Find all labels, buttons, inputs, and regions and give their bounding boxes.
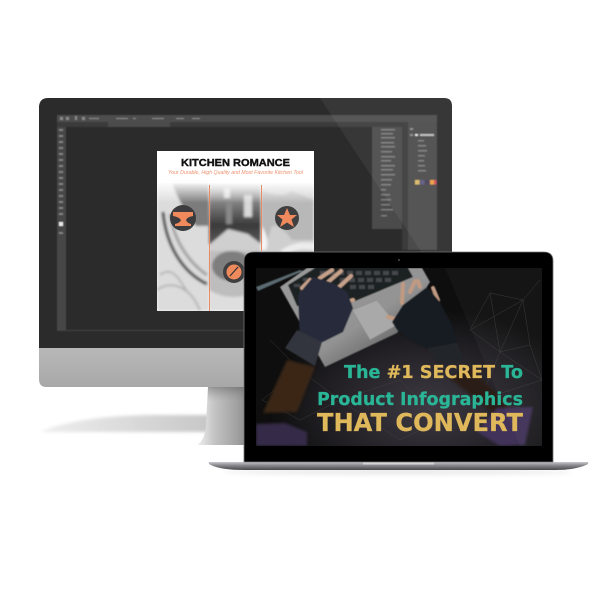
swatch rows	[415, 134, 434, 172]
headline line 2: Product Infographics	[317, 389, 523, 410]
textured cloth	[209, 229, 261, 251]
icon: gauge	[223, 261, 245, 283]
column top fade	[157, 181, 314, 203]
photo middle column	[209, 183, 261, 311]
left glove	[298, 277, 353, 345]
left forearm	[263, 360, 315, 413]
keyboard	[288, 268, 413, 310]
right cuff	[427, 343, 463, 367]
white shape	[261, 226, 267, 250]
stylus	[256, 270, 303, 291]
utensil rings	[157, 272, 200, 311]
photo left column	[157, 183, 209, 311]
right forearm	[450, 368, 512, 412]
laptop screen image	[256, 268, 542, 446]
monitor chin	[39, 340, 452, 387]
artboard	[157, 151, 314, 311]
photoshop interface	[57, 115, 437, 331]
dock icons	[410, 128, 413, 136]
hinge notch	[363, 462, 434, 464]
toolbar icons	[60, 116, 200, 120]
lid reflection	[445, 268, 542, 446]
right sleeve	[477, 407, 533, 446]
pan arc	[163, 212, 207, 284]
document tab bar	[57, 122, 437, 127]
screen reflection	[320, 98, 452, 348]
pot base	[208, 290, 244, 311]
orange divider left	[209, 185, 210, 311]
right fingers	[388, 281, 438, 320]
infographic scene	[39, 98, 588, 476]
lower pot	[208, 250, 261, 298]
icon: anvil	[170, 205, 196, 231]
headline line 1: The #1 SECRET To	[344, 362, 523, 383]
desktop monitor	[39, 98, 452, 445]
laptop headline	[317, 362, 523, 437]
artboard tagline: Your Durable, High Quality and Most Favorite Kitchen Tool	[168, 170, 304, 176]
left fingers	[302, 270, 353, 302]
swatches panel	[408, 122, 437, 250]
layer rows	[381, 129, 395, 216]
photo right column	[259, 185, 314, 252]
layers panel	[372, 127, 402, 229]
laptop photo	[256, 268, 533, 446]
icon: star	[275, 206, 299, 230]
table surface	[256, 268, 542, 446]
trackpad	[352, 300, 397, 340]
tools strip	[57, 127, 66, 331]
highlights	[224, 188, 230, 198]
tool icons	[59, 129, 63, 234]
laptop base	[209, 462, 588, 470]
colour swatches	[415, 180, 436, 184]
network pattern	[262, 280, 542, 440]
laptop lid	[244, 252, 553, 462]
side dock	[402, 127, 408, 250]
laptop shadow	[223, 470, 573, 474]
camera	[398, 259, 400, 261]
right glove	[392, 287, 457, 352]
monitor stand	[197, 387, 246, 445]
silver deck	[280, 268, 430, 367]
pot shading	[212, 251, 252, 281]
monitor shadow	[42, 415, 230, 432]
knife highlight	[260, 192, 314, 240]
left sleeve	[256, 423, 307, 446]
dark pan area	[172, 183, 209, 226]
keys	[294, 271, 398, 294]
orange divider right	[261, 185, 262, 251]
pan arc light	[170, 214, 207, 275]
artboard title: KITCHEN ROMANCE	[181, 157, 290, 169]
artboard paper	[157, 151, 314, 311]
monitor bezel	[39, 98, 452, 348]
active tab	[108, 122, 170, 127]
bottom strip	[57, 330, 247, 331]
top options bar	[57, 115, 437, 122]
laptop	[209, 252, 588, 470]
left cuff	[285, 330, 322, 366]
handle	[280, 242, 314, 252]
headline line 3: THAT CONVERT	[317, 408, 523, 437]
